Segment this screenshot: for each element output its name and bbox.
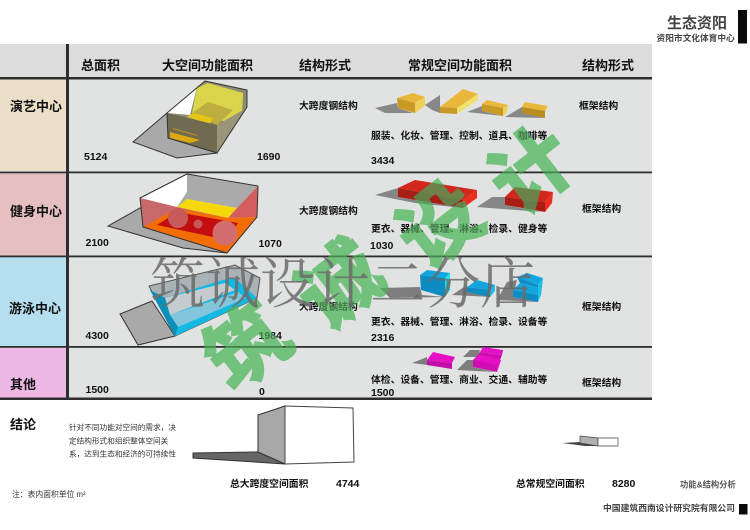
large span total label: 4744	[336, 478, 360, 490]
green watermark: 诚	[281, 226, 399, 345]
row: fitness centre data: 框架结构	[582, 202, 621, 215]
row labels: 游泳中心	[9, 301, 61, 316]
page header	[656, 10, 747, 44]
row: other data	[86, 373, 621, 399]
page header: 生态资阳	[667, 14, 727, 32]
large span total label: 总大跨度空间面积	[230, 477, 309, 490]
row labels: 健身中心	[10, 204, 62, 219]
green watermark: 筑	[188, 288, 306, 407]
table column headings: 结构形式	[582, 58, 634, 73]
table background	[0, 44, 652, 400]
large-span volume: performing arts	[133, 81, 247, 158]
conventional total volume	[562, 436, 618, 446]
conventional volumes: swimming	[380, 270, 543, 302]
large span total label	[230, 477, 360, 490]
green watermark: 诚	[281, 226, 399, 345]
conventional total label: 8280	[612, 478, 636, 490]
row: fitness centre data	[86, 202, 621, 252]
green watermark: 设	[381, 166, 499, 285]
row: other data: 0	[259, 386, 265, 398]
row: other data: 体检、设备、管理、商业、交通、辅助等	[371, 373, 548, 386]
section caption: 功能&结构分析	[680, 480, 736, 490]
row: performing arts centre data: 3434	[371, 155, 395, 167]
green watermark: 设	[381, 166, 499, 285]
conclusion heading and text	[10, 417, 176, 458]
row: swimming centre data: 1984	[258, 330, 282, 342]
row: swimming centre data	[86, 300, 621, 344]
table column headings: 常规空间功能面积	[408, 58, 512, 73]
row: other data: 1500	[86, 384, 109, 396]
conclusion heading and text: 系，达到生态和经济的可持续性	[69, 448, 176, 458]
green watermark	[188, 111, 591, 407]
table column headings: 总面积	[81, 58, 120, 73]
row: performing arts centre data: 服装、化妆、管理、控制、道具、咖啡等	[371, 129, 548, 142]
row: fitness centre data: 更衣、器械、管理、淋浴、检录、健身等	[371, 222, 548, 235]
green watermark: 计	[473, 111, 591, 230]
row: fitness centre data: 1030	[370, 240, 394, 252]
page header: 资阳市文化体育中心	[656, 32, 735, 43]
conclusion heading and text: 结论	[10, 417, 36, 432]
row labels	[9, 99, 62, 392]
row: swimming centre data: 框架结构	[582, 300, 621, 313]
row: performing arts centre data: 1690	[257, 151, 281, 163]
row labels: 其他	[10, 377, 36, 392]
conclusion heading and text: 针对不同功能对空间的需求，决	[69, 422, 176, 432]
row: performing arts centre data: 大跨度钢结构	[299, 99, 358, 112]
footnote: 注：表内面积单位 m²	[12, 489, 86, 499]
company footer: 中国建筑西南设计研究院有限公司	[603, 502, 735, 513]
row: fitness centre data: 大跨度钢结构	[299, 204, 358, 217]
conclusion heading and text: 定结构形式和组织整体空间关	[69, 436, 169, 446]
conventional volumes: other	[412, 347, 503, 372]
row: other data: 框架结构	[582, 376, 621, 389]
large span total volume	[193, 406, 354, 464]
row: other data: 1500	[371, 387, 395, 399]
large-span volume: fitness	[108, 174, 258, 253]
green watermark: 筑	[188, 288, 306, 407]
table column headings: 大空间功能面积	[162, 58, 253, 73]
row: fitness centre data: 2100	[86, 237, 109, 249]
row: swimming centre data: 更衣、器械、管理、淋浴、检录、设备等	[371, 315, 548, 328]
green watermark: 计	[473, 111, 591, 230]
row: swimming centre data: 大跨度钢结构	[299, 300, 358, 313]
conventional total label	[516, 477, 636, 490]
row: performing arts centre data	[84, 99, 618, 167]
conventional total label: 总常规空间面积	[516, 477, 585, 490]
grey watermark: 筑诚设计二分店	[150, 254, 535, 315]
conventional volumes: fitness	[375, 180, 553, 212]
conventional volumes: performing arts	[375, 89, 548, 118]
table column headings	[81, 58, 634, 73]
row: swimming centre data: 4300	[86, 330, 109, 342]
row: swimming centre data: 2316	[371, 332, 395, 344]
row labels: 演艺中心	[10, 99, 62, 114]
table column headings: 结构形式	[299, 58, 351, 73]
large-span volume: swimming	[120, 265, 260, 345]
row: performing arts centre data: 5124	[84, 151, 108, 163]
row: performing arts centre data: 框架结构	[579, 99, 618, 112]
row: fitness centre data: 1070	[258, 238, 282, 250]
